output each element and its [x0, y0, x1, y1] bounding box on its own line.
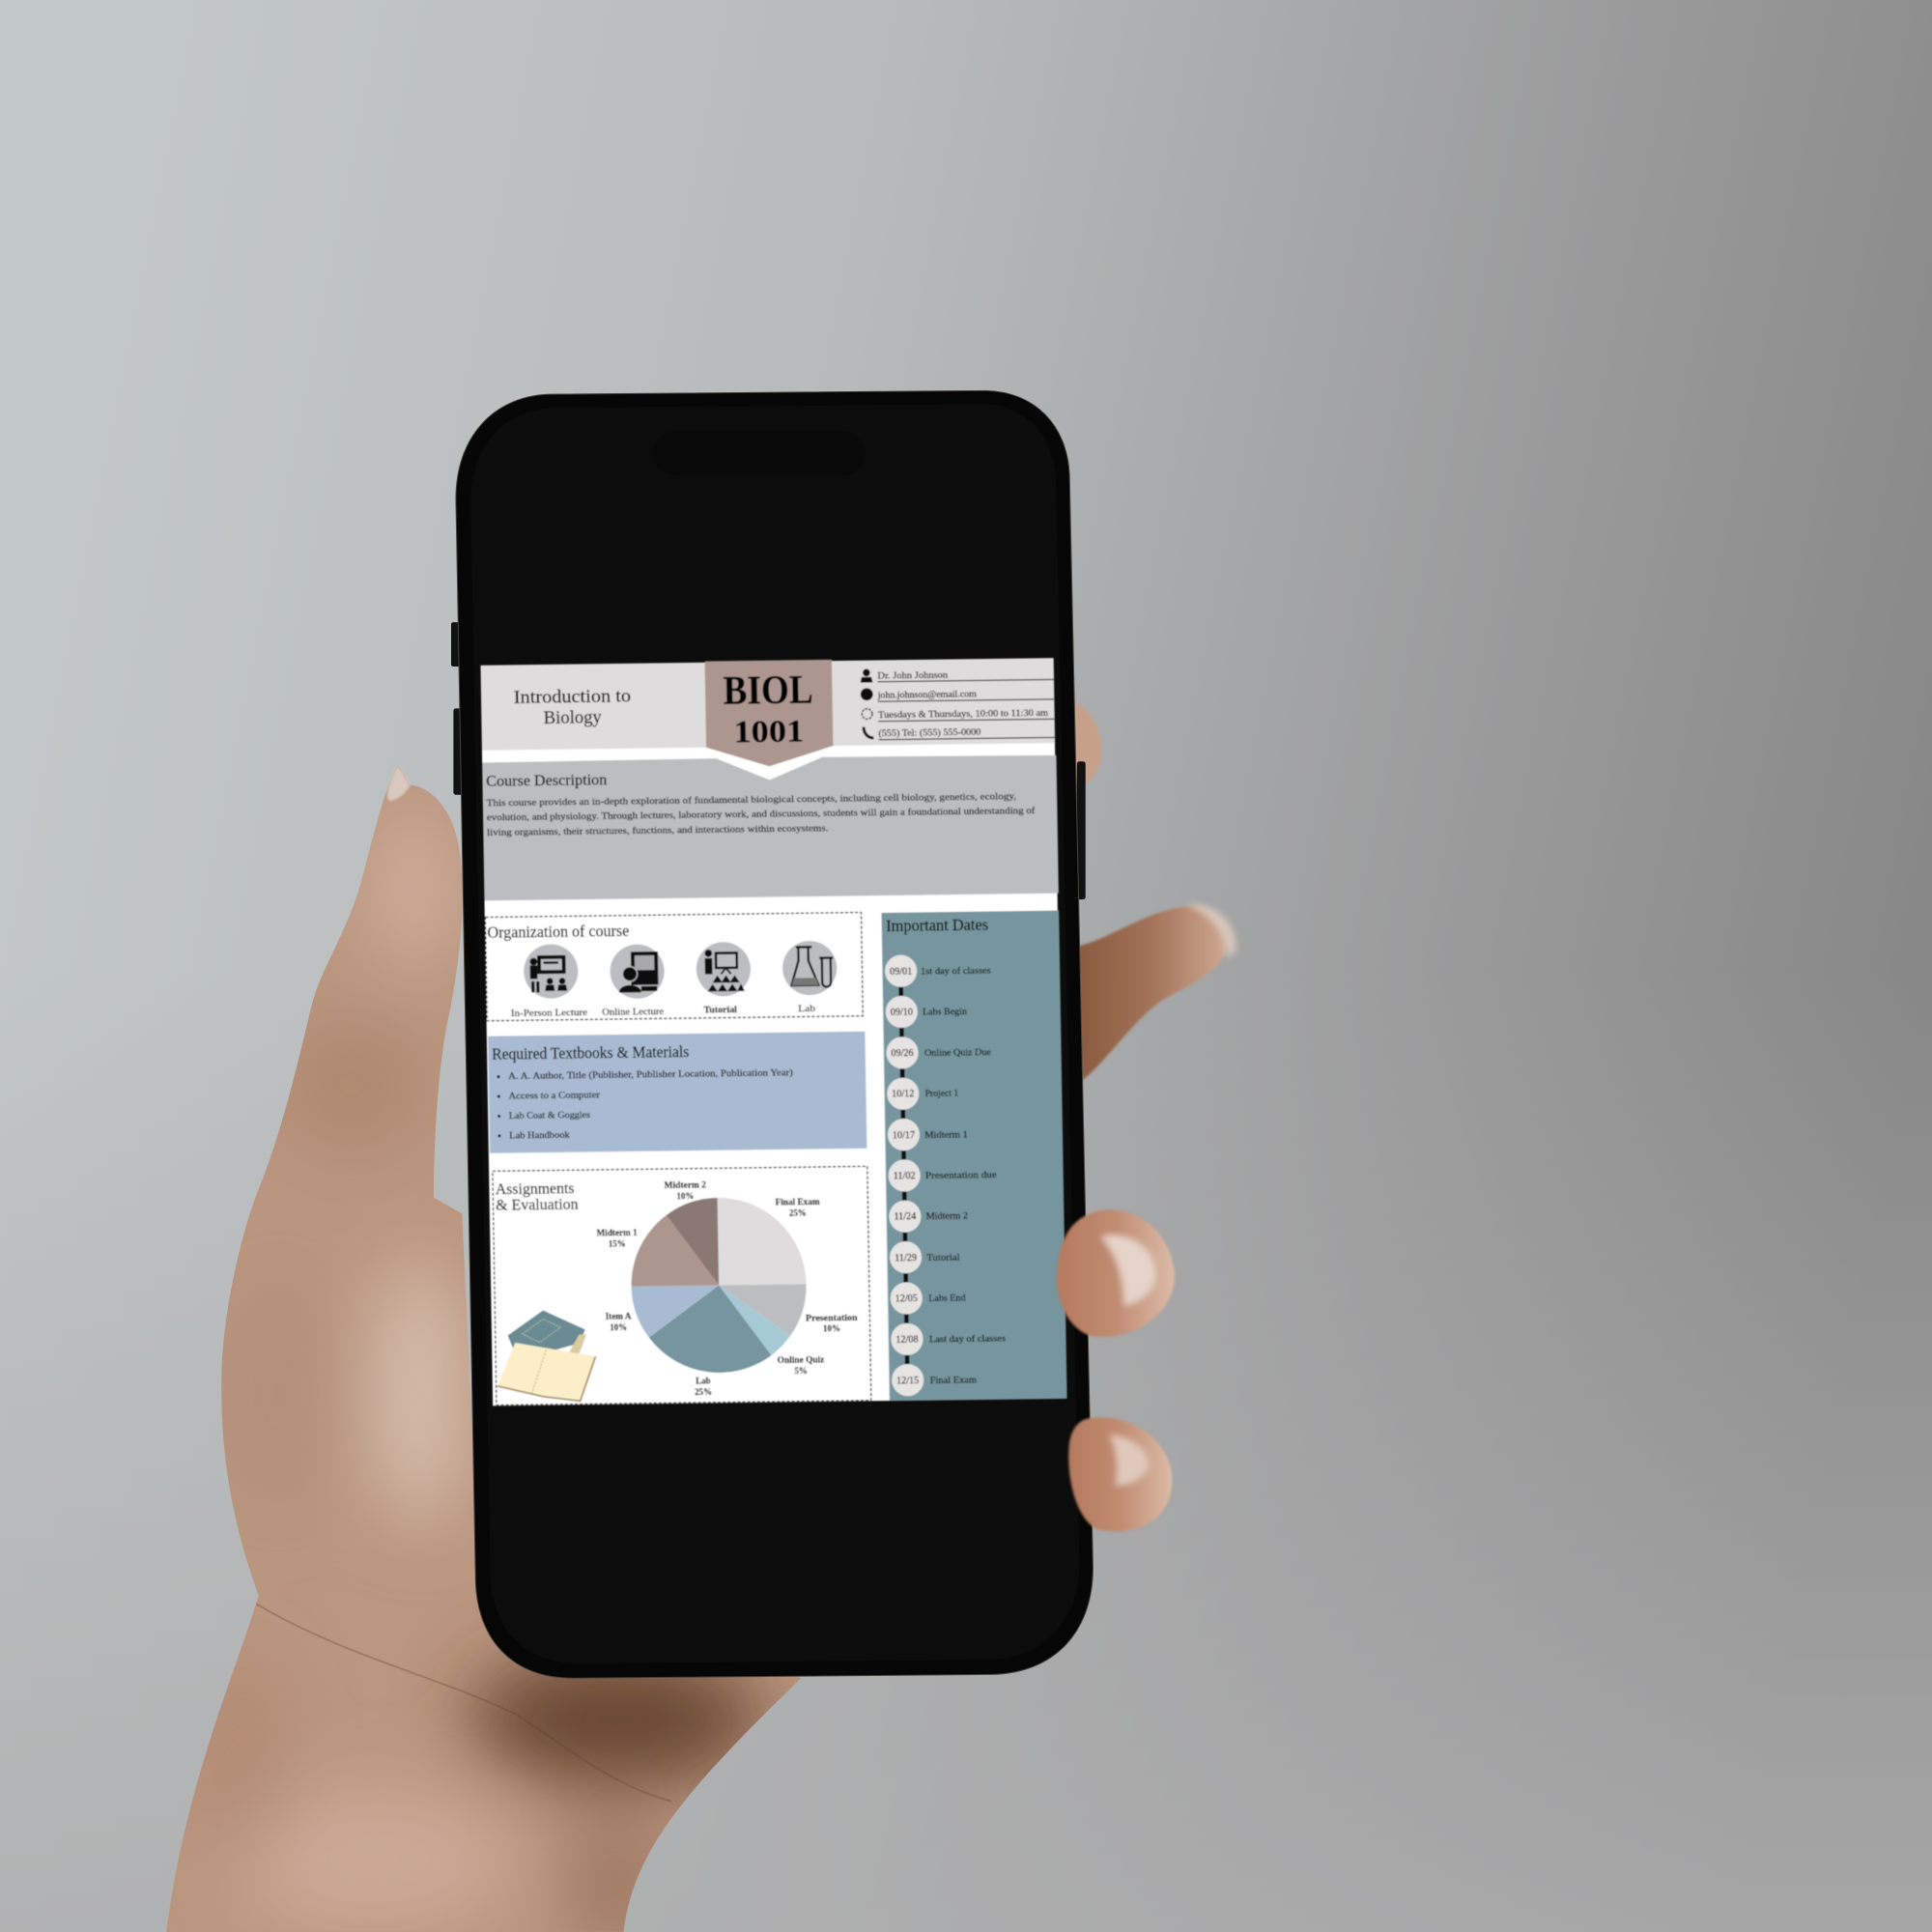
- pie labels: 25%: [789, 1208, 807, 1218]
- heading: & Evaluation: [496, 1196, 579, 1213]
- date numbers: 10/17: [893, 1130, 915, 1141]
- pie labels: Lab: [696, 1376, 711, 1385]
- date numbers: 11/29: [895, 1253, 917, 1264]
- date numbers: 12/05: [895, 1293, 918, 1304]
- contact details: (555) Tel: (555) 555-0000: [878, 727, 981, 739]
- date markers: [885, 954, 924, 1396]
- thumb nail: [387, 766, 411, 801]
- finger in front of phone, upper: [1057, 1209, 1175, 1337]
- fingernail: [1109, 1435, 1149, 1486]
- organization labels: Online Lecture: [602, 1007, 664, 1018]
- date labels: Final Exam: [930, 1375, 978, 1386]
- contact details: Dr. John Johnson: [877, 670, 948, 682]
- course code tag: BIOL: [723, 668, 813, 714]
- date labels: 1st day of classes: [921, 965, 991, 977]
- pie labels: Online Quiz: [778, 1354, 824, 1365]
- icon: clock: [862, 709, 872, 720]
- materials list: A. A. Author, Title (Publisher, Publisher Location, Publication Year): [508, 1067, 793, 1082]
- pie labels: 10%: [676, 1191, 694, 1201]
- course title: Introduction to: [514, 686, 631, 707]
- contact details: Tuesdays & Thursdays, 10:00 to 11:30 am: [878, 708, 1049, 721]
- course title: Biology: [544, 707, 603, 727]
- date numbers: [890, 966, 919, 1386]
- course title: [514, 686, 632, 728]
- icon: email: [861, 688, 873, 700]
- dynamic island: [653, 431, 865, 475]
- timeline spine: [898, 972, 910, 1379]
- fingernail: [1100, 1235, 1156, 1306]
- date numbers: 11/24: [894, 1211, 916, 1222]
- screen glass: [470, 404, 1079, 1663]
- date labels: Midterm 1: [924, 1129, 968, 1141]
- pie labels: Item A: [606, 1311, 632, 1321]
- date labels: Midterm 2: [925, 1210, 968, 1222]
- icon: in-person lecture: [524, 944, 579, 999]
- finger in front of phone, lower: [1068, 1417, 1172, 1531]
- description paragraph: evolution, and physiology. Through lectures, laboratory work, and discussions, students will gain a foundational understanding of: [487, 806, 1036, 823]
- organization labels: Lab: [798, 1004, 815, 1014]
- date numbers: 09/10: [891, 1007, 913, 1018]
- date numbers: 12/08: [895, 1335, 919, 1346]
- date labels: [921, 965, 1007, 1386]
- date labels: Project 1: [925, 1089, 958, 1099]
- icon: person: [860, 668, 872, 683]
- pie labels: 10%: [823, 1323, 840, 1333]
- description paragraph: This course provides an in-depth exploration of fundamental biological concepts, including cell biology, genetics, ecology,: [487, 791, 1016, 809]
- date labels: Presentation due: [925, 1170, 997, 1181]
- contact details: [860, 667, 1055, 740]
- panel: organization of course: Organization of course: [487, 922, 629, 942]
- course code tag: [705, 660, 834, 767]
- organization labels: Tutorial: [703, 1005, 737, 1015]
- finger peeking behind phone, top: [1074, 702, 1101, 788]
- materials list: Lab Handbook: [509, 1129, 570, 1141]
- pie labels: 10%: [610, 1322, 627, 1332]
- description paragraph: [487, 791, 1037, 838]
- date numbers: 09/01: [890, 966, 912, 978]
- pie labels: 15%: [609, 1238, 626, 1249]
- description paragraph: living organisms, their structures, functions, and interactions within ecosystems.: [487, 823, 829, 838]
- date numbers: 12/15: [896, 1376, 919, 1386]
- panel: course description: [482, 754, 1059, 900]
- course code tag: 1001: [733, 713, 805, 750]
- date labels: Labs End: [928, 1293, 966, 1304]
- panel: important dates timeline: [882, 911, 1067, 1401]
- heading: [496, 1180, 579, 1213]
- date labels: Tutorial: [926, 1252, 960, 1264]
- date labels: Last day of classes: [929, 1334, 1006, 1346]
- side buttons: [451, 622, 1086, 899]
- date numbers: 09/26: [891, 1048, 914, 1059]
- panel: assignments and evaluation: [493, 1166, 871, 1406]
- finger behind phone, middle: [1078, 904, 1236, 1081]
- header band: [480, 657, 1055, 770]
- icon: books: [497, 1310, 596, 1402]
- organization labels: [511, 1004, 815, 1019]
- panel: important dates timeline: Important Dates: [886, 916, 988, 935]
- materials list: [497, 1067, 794, 1141]
- contact details: john.johnson@email.com: [877, 689, 977, 700]
- hand: palm and thumb: [166, 767, 801, 1932]
- heading: Assignments: [496, 1180, 575, 1198]
- pie chart: [630, 1197, 808, 1374]
- organization labels: In-Person Lecture: [511, 1008, 587, 1019]
- fingernail edge: [1185, 904, 1236, 958]
- pie labels: 25%: [695, 1386, 712, 1397]
- date labels: Online Quiz Due: [924, 1047, 991, 1059]
- icon: phone: [864, 726, 873, 738]
- phone frame: [456, 390, 1093, 1678]
- icon: tutorial: [696, 942, 751, 997]
- phone body: [451, 390, 1093, 1678]
- date numbers: 10/12: [892, 1089, 914, 1100]
- icon: lab flask and test tube: [782, 941, 838, 995]
- pie labels: Midterm 2: [664, 1179, 707, 1190]
- date numbers: 11/02: [894, 1171, 916, 1181]
- pie labels: [596, 1178, 859, 1398]
- panel: organization of course: [485, 913, 863, 1021]
- pie labels: Midterm 1: [596, 1228, 638, 1237]
- panel: required textbooks and materials: [488, 1032, 867, 1153]
- date labels: Labs Begin: [923, 1007, 967, 1017]
- panel: required textbooks and materials: Required Textbooks & Materials: [492, 1042, 689, 1064]
- page background: [480, 658, 1065, 1406]
- pie labels: 5%: [794, 1366, 808, 1376]
- pie labels: Presentation: [806, 1313, 858, 1323]
- materials list: Access to a Computer: [508, 1090, 601, 1101]
- materials list: Lab Coat & Goggles: [509, 1110, 590, 1122]
- panel: course description: Course Description: [486, 772, 607, 790]
- pie labels: Final Exam: [776, 1197, 820, 1207]
- icon: online lecture: [610, 944, 665, 999]
- phone screen document: [480, 657, 1067, 1406]
